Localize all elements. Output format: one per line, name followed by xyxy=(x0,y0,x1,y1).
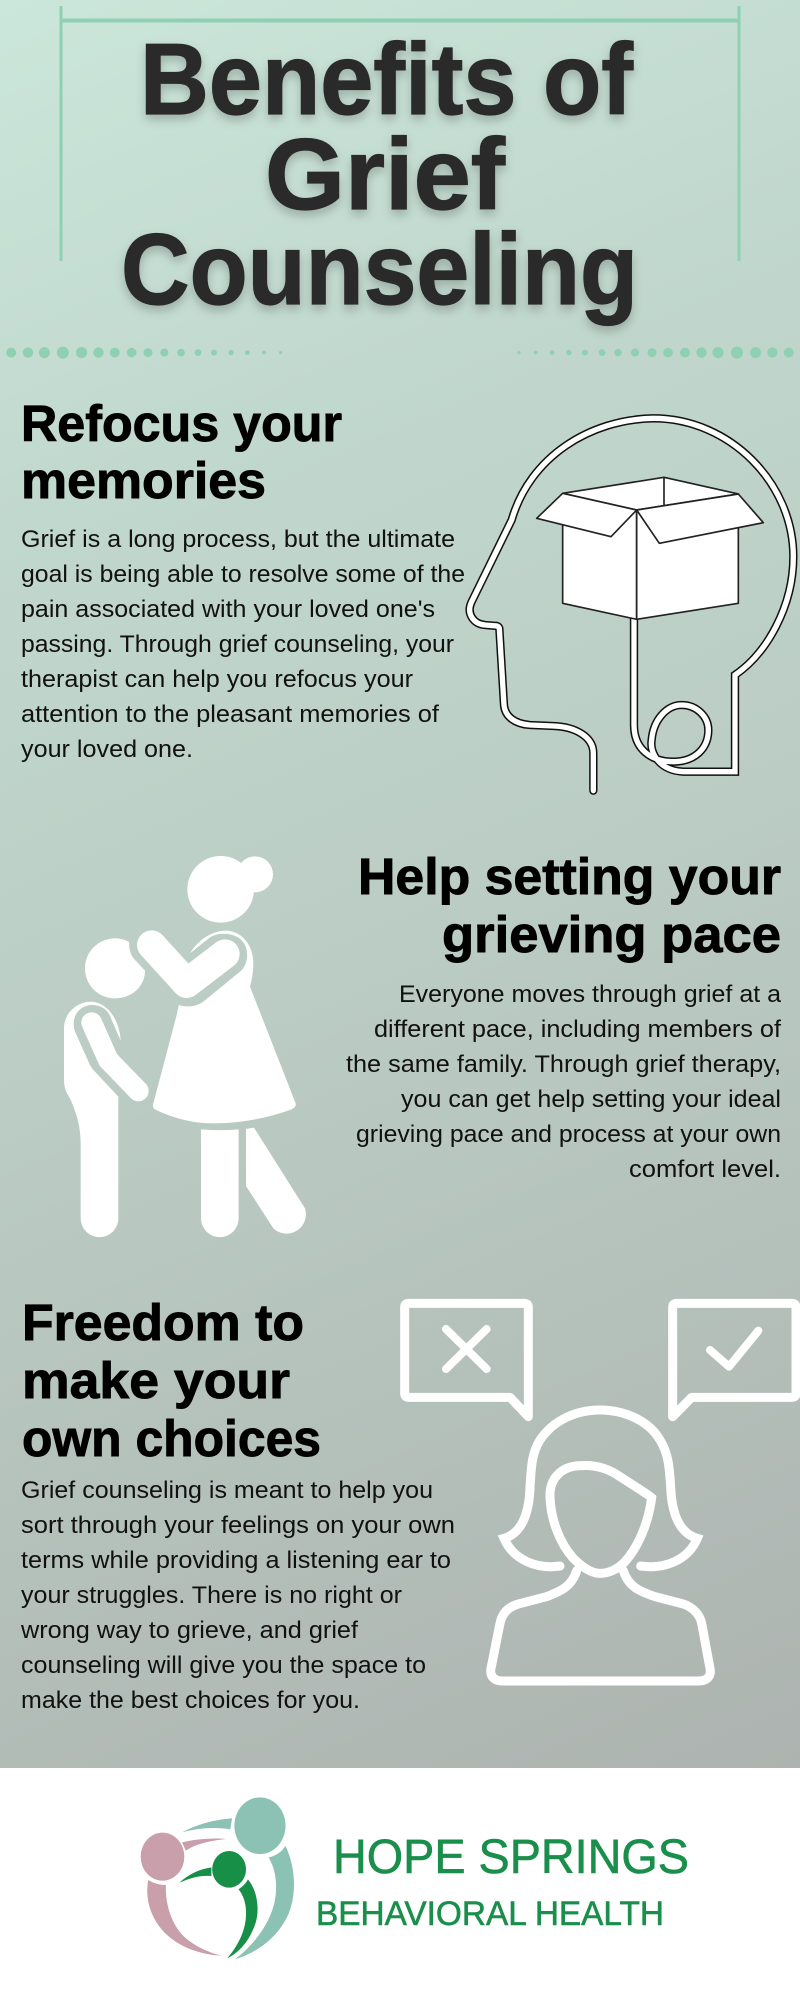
dotted divider right xyxy=(517,347,794,359)
heading: refocus your memories: memories xyxy=(21,452,266,509)
text block: choices body: terms while providing a listening ear to xyxy=(21,1547,451,1574)
icon: check speech bubble xyxy=(673,1303,796,1417)
text block: grieving pace body xyxy=(346,981,781,1183)
logo: hope springs wordmark: BEHAVIORAL HEALTH xyxy=(316,1895,664,1933)
heading: help setting your grieving pace: grieving pace xyxy=(442,906,781,963)
dotted divider left xyxy=(6,347,282,359)
icon: mother comforting child xyxy=(64,856,306,1237)
panel: freedom to make your own choices xyxy=(20,1294,455,1714)
heading: refocus your memories xyxy=(21,395,342,509)
heading: freedom to make your own choices: Freedom to xyxy=(22,1294,304,1351)
icon: woman with choice bubbles xyxy=(405,1303,796,1681)
text block: refocus body: goal is being able to resolve some of the xyxy=(21,561,465,588)
logo: hope springs wordmark: HOPE SPRINGS xyxy=(333,1831,689,1884)
icon: head with open box xyxy=(470,418,793,791)
text block: refocus body: Grief is a long process, but the ultimate xyxy=(21,526,455,553)
text block: choices body: Grief counseling is meant to help you xyxy=(21,1477,433,1504)
text block: grieving pace body: the same family. Through grief therapy, xyxy=(346,1051,781,1078)
heading: help setting your grieving pace: Help setting your xyxy=(358,848,781,905)
title: Benefits of xyxy=(140,24,633,136)
text block: refocus body xyxy=(21,526,465,763)
panel: help setting your grieving pace xyxy=(346,848,781,1183)
text block: grieving pace body: Everyone moves through grief at a xyxy=(399,981,781,1008)
icon: x speech bubble xyxy=(405,1303,528,1417)
text block: grieving pace body: you can get help setting your ideal xyxy=(401,1086,781,1113)
title bracket xyxy=(60,6,740,261)
text block: choices body: your struggles. There is no right or xyxy=(21,1582,402,1609)
title: Grief xyxy=(265,119,505,231)
text block: grieving pace body: grieving pace and process at your own xyxy=(356,1121,781,1148)
text block: choices body: wrong way to grieve, and grief xyxy=(20,1617,358,1644)
footer panel xyxy=(0,1768,800,2000)
heading: freedom to make your own choices xyxy=(22,1294,321,1467)
heading: help setting your grieving pace xyxy=(358,848,781,963)
logo: hope springs symbol xyxy=(141,1797,294,1959)
logo: hope springs wordmark xyxy=(316,1831,689,1933)
text block: refocus body: passing. Through grief counseling, your xyxy=(21,631,454,658)
text block: grieving pace body: different pace, including members of xyxy=(374,1016,781,1043)
icon: woman outline xyxy=(491,1410,710,1681)
text block: choices body: make the best choices for you. xyxy=(21,1687,360,1714)
text block: refocus body: therapist can help you refocus your xyxy=(21,666,413,693)
text block: refocus body: attention to the pleasant memories of xyxy=(21,701,439,728)
heading: freedom to make your own choices: own choices xyxy=(22,1410,321,1467)
heading: refocus your memories: Refocus your xyxy=(21,395,342,452)
text block: choices body xyxy=(20,1477,455,1714)
text block: refocus body: your loved one. xyxy=(21,736,193,763)
heading: freedom to make your own choices: make your xyxy=(22,1352,290,1409)
title xyxy=(121,24,638,326)
text block: grieving pace body: comfort level. xyxy=(629,1156,781,1183)
title: Counseling xyxy=(121,214,638,326)
text block: refocus body: pain associated with your loved one's xyxy=(21,596,435,623)
panel: refocus your memories xyxy=(21,395,465,763)
text block: choices body: counseling will give you the space to xyxy=(21,1652,426,1679)
text block: choices body: sort through your feelings on your own xyxy=(21,1512,455,1539)
